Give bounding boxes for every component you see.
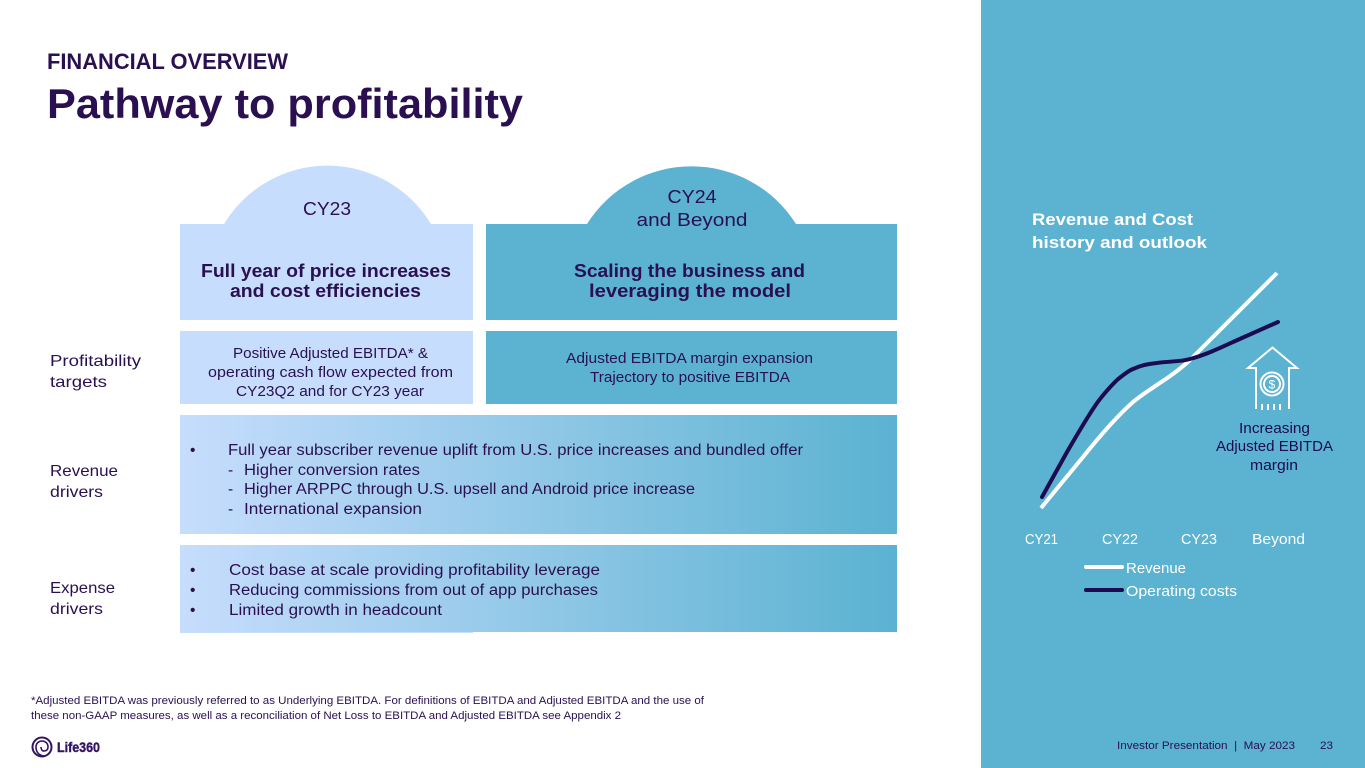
panel: revenue drivers: Higher conversion rates <box>244 462 420 479</box>
footnote: *Adjusted EBITDA was previously referred to as Underlying EBITDA. For definitions of EBITDA and Adjusted EBITDA and the use of <box>31 695 705 707</box>
line: operating costs <box>1042 322 1278 497</box>
panel: right sidebar background <box>981 0 1365 768</box>
legend: Operating costs <box>1126 583 1237 600</box>
callout: increasing margin <box>1216 420 1333 474</box>
title: Pathway to profitability <box>47 80 524 127</box>
row label: expense drivers: Expense <box>50 580 115 597</box>
chart axis labels <box>1025 531 1305 548</box>
panel: CY24 and Beyond header: CY24 <box>668 187 716 207</box>
row label: expense drivers: drivers <box>50 601 103 618</box>
footer: Investor Presentation | May 2023 <box>1117 740 1295 752</box>
row label: profitability targets: Profitability <box>50 353 141 370</box>
chart axis labels: Beyond <box>1252 531 1305 548</box>
panel: revenue drivers: Full year subscriber revenue uplift from U.S. price increases and bundled offer <box>228 442 803 459</box>
panel: expense drivers: Limited growth in headcount <box>229 602 443 619</box>
footnote <box>31 695 705 722</box>
callout: increasing margin: Adjusted EBITDA <box>1216 438 1333 455</box>
row label: profitability targets <box>50 353 141 391</box>
chart axis labels: CY21 <box>1025 531 1058 548</box>
panel: CY24 profitability target: Adjusted EBITDA margin expansion <box>566 350 813 367</box>
line chart: revenue vs operating costs <box>1041 273 1278 508</box>
row label: expense drivers <box>50 580 115 618</box>
panel: CY24 and Beyond header <box>486 166 897 320</box>
panel: expense drivers <box>180 545 897 633</box>
icon: house arrow with dollar <box>1248 348 1297 410</box>
panel: CY23 profitability target: operating cash flow expected from <box>208 364 453 381</box>
panel: expense drivers: Cost base at scale providing profitability leverage <box>229 562 600 579</box>
panel: revenue drivers: - <box>228 462 233 479</box>
panel: expense drivers: • <box>190 562 195 579</box>
row label: revenue drivers: Revenue <box>50 463 118 480</box>
callout: increasing margin: margin <box>1250 457 1298 474</box>
panel: revenue drivers <box>180 415 897 534</box>
panel: CY23 header: Full year of price increases <box>201 261 451 281</box>
panel: CY24 and Beyond header: Scaling the business and <box>574 261 805 281</box>
sidebar heading <box>1032 210 1208 252</box>
line: revenue <box>1041 273 1277 508</box>
panel: CY23 header: CY23 <box>303 199 351 219</box>
panel: CY23 profitability target: Positive Adjusted EBITDA* & <box>233 345 428 362</box>
panel: revenue drivers: - <box>228 481 233 498</box>
panel: revenue drivers: International expansion <box>244 501 422 518</box>
panel: expense drivers: • <box>190 602 195 619</box>
panel: CY24 profitability target <box>486 331 897 404</box>
panel: CY24 and Beyond header: and Beyond <box>636 210 748 230</box>
sidebar heading: history and outlook <box>1032 233 1208 252</box>
panel: CY24 profitability target: Trajectory to positive EBITDA <box>590 369 790 386</box>
logo: Life360 <box>32 738 100 756</box>
panel: revenue drivers: - <box>228 501 233 518</box>
panel: CY23 header <box>180 166 473 320</box>
legend: Revenue <box>1126 560 1186 577</box>
panel: CY23 profitability target <box>180 331 473 404</box>
legend <box>1086 560 1237 600</box>
footnote: these non-GAAP measures, as well as a reconciliation of Net Loss to EBITDA and Adjusted EBITDA see Appendix 2 <box>31 710 621 722</box>
icon: house arrow with dollar: $ <box>1269 378 1276 392</box>
section label: FINANCIAL OVERVIEW <box>47 49 288 74</box>
chart axis labels: CY22 <box>1102 531 1138 548</box>
sidebar heading: Revenue and Cost <box>1032 210 1193 229</box>
logo: Life360: Life360 <box>57 739 100 755</box>
panel: CY23 profitability target: CY23Q2 and for CY23 year <box>236 383 424 400</box>
panel: revenue drivers: • <box>190 442 195 459</box>
footer: 23 <box>1320 740 1333 752</box>
row label: revenue drivers <box>50 463 118 501</box>
panel: expense drivers: Reducing commissions from out of app purchases <box>229 582 598 599</box>
panel: expense drivers: • <box>190 582 195 599</box>
chart axis labels: CY23 <box>1181 531 1217 548</box>
panel: CY23 header: and cost efficiencies <box>230 281 421 301</box>
panel: revenue drivers: Higher ARPPC through U.S. upsell and Android price increase <box>244 481 695 498</box>
callout: increasing margin: Increasing <box>1239 420 1310 437</box>
panel: CY24 and Beyond header: leveraging the model <box>589 281 791 301</box>
row label: revenue drivers: drivers <box>50 484 103 501</box>
row label: profitability targets: targets <box>50 374 107 391</box>
